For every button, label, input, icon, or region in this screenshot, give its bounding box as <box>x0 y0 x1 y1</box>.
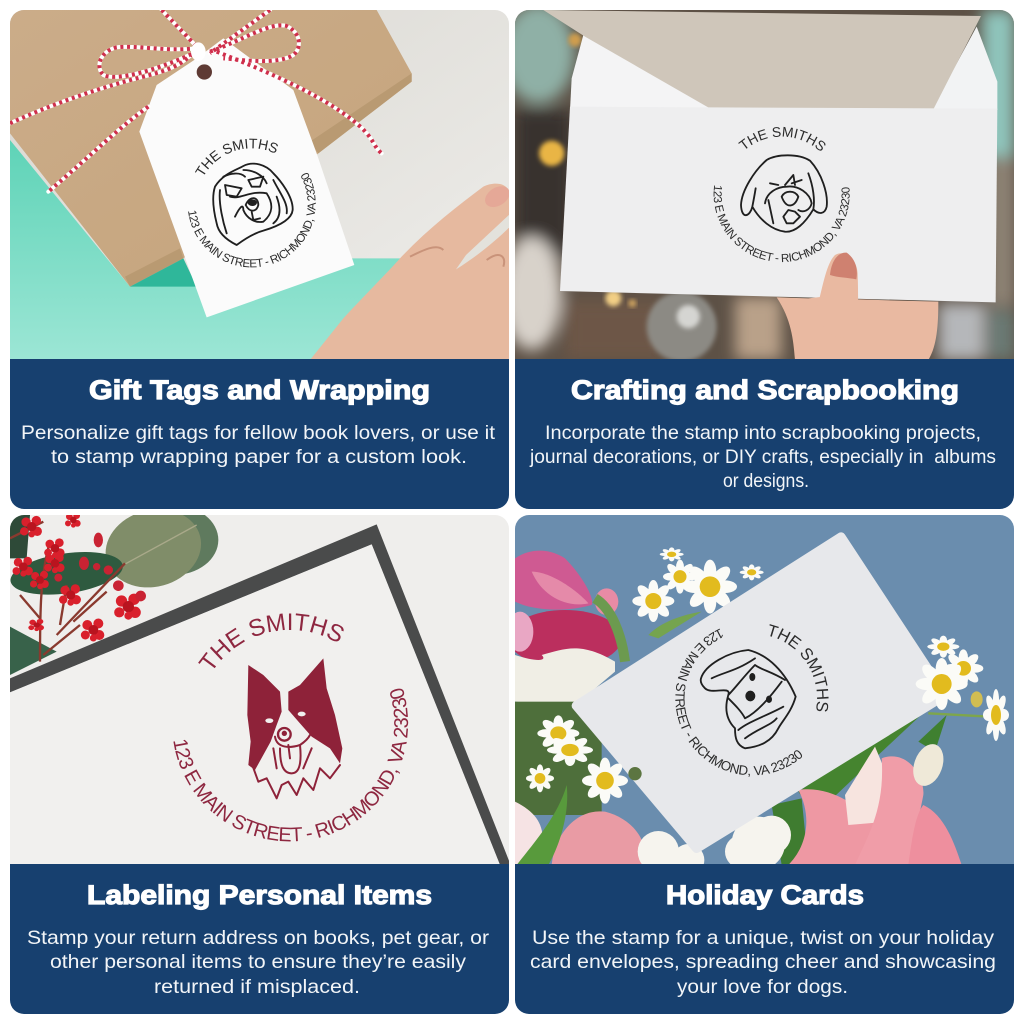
icon: hand <box>310 182 513 360</box>
stamp: the smiths round address in red <box>173 613 408 842</box>
kraft insert card <box>543 10 981 109</box>
caption panel: labeling <box>10 864 509 1014</box>
blurred holiday background <box>502 3 1015 360</box>
heading: crafting and scrapbooking: Crafting and Scrapbooking <box>571 375 959 405</box>
body text: gift tags: to stamp wrapping paper for a custom look. <box>51 446 467 468</box>
envelope back and flap <box>570 36 708 108</box>
icon: fluffy dog line drawing <box>741 155 827 232</box>
caption panel: holiday <box>515 864 1014 1014</box>
body text: labeling: Stamp your return address on books, pet gear, or <box>27 927 490 949</box>
stamp: the smiths round address on card: 123 E MAIN STREET - RICHMOND, VA 23230 <box>675 628 802 777</box>
icon: dark book cover <box>10 524 510 865</box>
icon: kraft gift box <box>10 10 412 287</box>
icon: shaggy dog line drawing <box>213 164 293 245</box>
stamp: the smiths round address on gift tag: 123 E MAIN STREET - RICHMOND, VA 23230 <box>188 173 316 268</box>
heading: holiday cards: Holiday Cards <box>666 880 864 910</box>
panel: gift tags and wrapping <box>10 10 509 509</box>
photo: book with red stamp <box>10 515 509 864</box>
body text: gift tags <box>21 422 496 468</box>
body text: holiday: Use the stamp for a unique, twist on your holiday <box>532 927 994 949</box>
icon: white gift tag <box>139 38 354 317</box>
body text: gift tags: Personalize gift tags for fellow book lovers, or use it <box>21 422 496 444</box>
panel: holiday cards <box>515 515 1014 1014</box>
body text: crafting: Incorporate the stamp into scrapbooking projects, <box>545 422 981 444</box>
stamp: the smiths round address in red: THE SMITHS <box>198 613 344 668</box>
body text: crafting: or designs. <box>723 470 809 492</box>
photo: envelope held in hand <box>515 10 1014 359</box>
daisies in front of card <box>582 636 1009 804</box>
icon: red and white twine bow <box>10 10 382 192</box>
body text: labeling <box>27 927 490 998</box>
stamp: the smiths round address on envelope <box>714 126 850 262</box>
caption panel: crafting <box>515 359 1014 509</box>
icon: white card <box>576 537 945 848</box>
body text: labeling: other personal items to ensure they’re easily <box>50 951 466 973</box>
panel: labeling personal items <box>10 515 509 1014</box>
body text: crafting: journal decorations, or DIY crafts, especially in albums <box>529 446 996 468</box>
stamp: the smiths round address on gift tag: THE SMITHS <box>195 138 278 174</box>
icon: pink and white bouquet background <box>507 551 990 876</box>
panel: crafting and scrapbooking <box>515 10 1014 509</box>
icon: hand holding envelope <box>777 253 938 360</box>
photo: gift tag on kraft box <box>10 10 509 359</box>
stamp: the smiths round address on card: THE SMITHS <box>770 624 829 712</box>
icon: eucalyptus leaf and red flowers <box>10 515 218 675</box>
book page <box>10 544 500 865</box>
icon: border collie in crimson <box>247 658 342 798</box>
heading: labeling personal items: Labeling Personal Items <box>87 880 432 910</box>
stamp: the smiths round address on envelope: THE SMITHS <box>738 126 826 151</box>
caption panel: gift tags <box>10 359 509 509</box>
body text: crafting <box>529 422 996 492</box>
stamp: the smiths round address in red: 123 E MAIN STREET - RICHMOND, VA 23230 <box>173 688 408 842</box>
body text: holiday: your love for dogs. <box>677 976 848 998</box>
body text: holiday <box>530 927 996 998</box>
icon: spaniel dog line drawing <box>701 650 796 748</box>
photo: card with flowers <box>515 515 1014 864</box>
icon: white envelope front <box>560 107 997 302</box>
daisies behind card <box>526 547 764 792</box>
body text: holiday: card envelopes, spreading cheer and showcasing <box>530 951 996 973</box>
stamp: the smiths round address on envelope: 123 E MAIN STREET - RICHMOND, VA 23230 <box>714 186 850 262</box>
body text: labeling: returned if misplaced. <box>154 976 360 998</box>
heading: gift tags and wrapping: Gift Tags and Wrapping <box>89 375 430 405</box>
